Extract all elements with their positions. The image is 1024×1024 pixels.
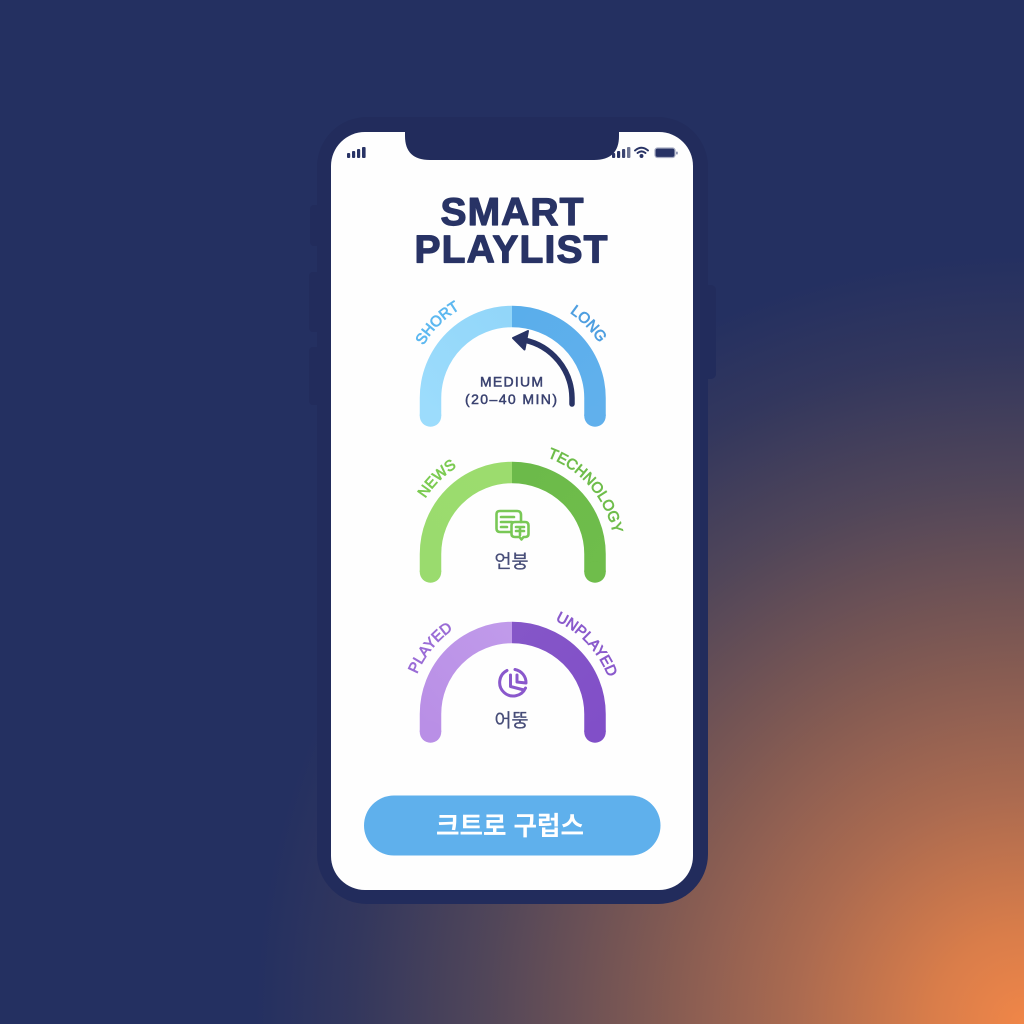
phone frame — [317, 117, 708, 904]
title — [414, 191, 608, 272]
icon: pie clock — [500, 670, 526, 696]
notch — [405, 131, 619, 160]
korean label: 어뚱 — [494, 710, 529, 731]
arc segments — [420, 316, 606, 427]
label unplayed: UNPLAYED — [557, 611, 616, 676]
gauge: played — [408, 611, 616, 743]
label played: PLAYED — [408, 623, 451, 674]
phone side buttons — [309, 205, 716, 405]
gauge: topics — [417, 447, 624, 583]
wifi icon — [635, 148, 648, 157]
gauge: duration — [416, 300, 606, 427]
button label: 크트로 구럽스 — [436, 811, 584, 841]
korean label: 언붕 — [494, 551, 529, 572]
icon: news chat — [496, 511, 528, 540]
label medium — [465, 374, 557, 407]
phone screen — [331, 132, 693, 890]
label long: LONG — [570, 304, 606, 342]
label medium: (20–40 MIN) — [465, 391, 557, 407]
status signal left — [347, 147, 366, 158]
label short: SHORT — [416, 300, 458, 344]
title: PLAYLIST — [414, 228, 608, 272]
arrow — [513, 331, 572, 404]
status icons right — [612, 147, 678, 158]
label medium: MEDIUM — [480, 374, 543, 390]
arc segments — [420, 472, 606, 583]
button — [364, 796, 660, 856]
battery icon — [655, 148, 678, 158]
arc segments — [420, 632, 606, 743]
phone — [317, 132, 716, 904]
label news: NEWS — [417, 460, 456, 498]
title: SMART — [440, 191, 584, 234]
label technology: TECHNOLOGY — [550, 447, 624, 532]
